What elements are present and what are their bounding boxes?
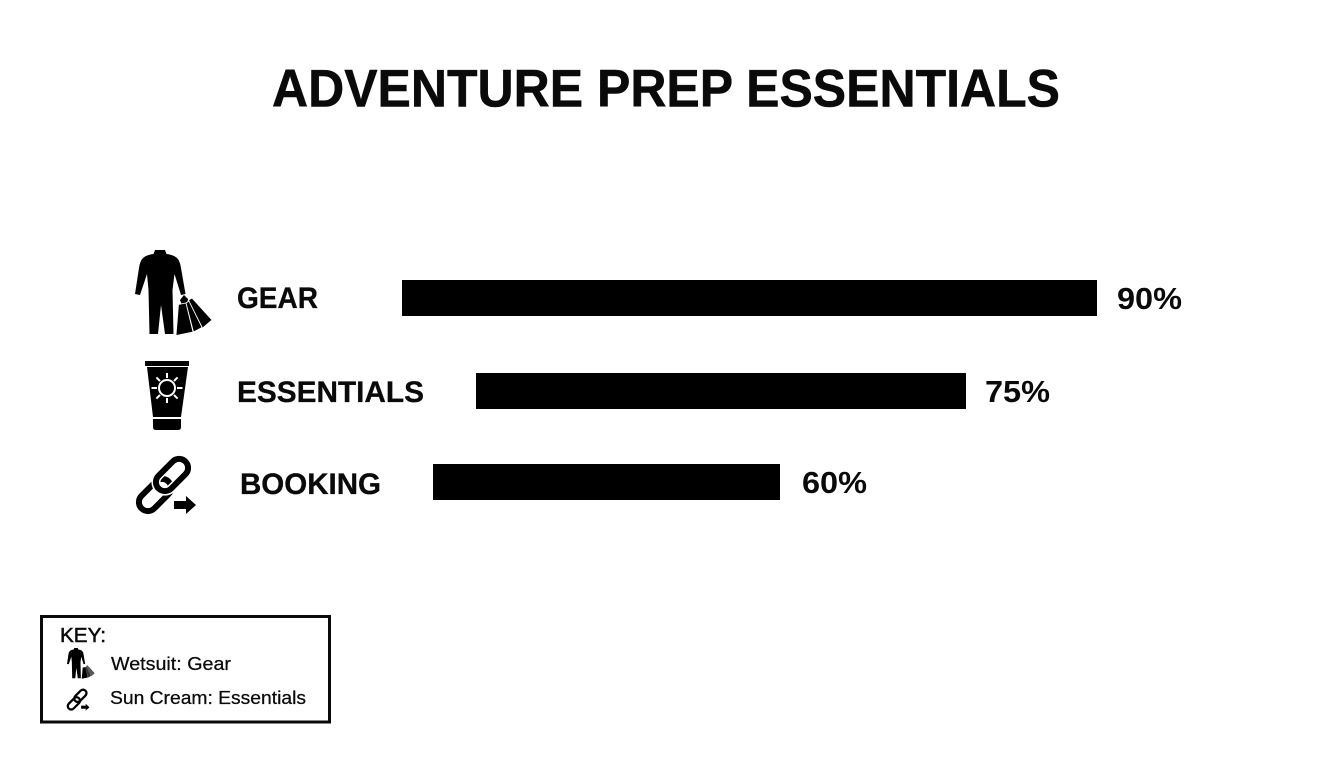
legend heading: KEY: [60, 625, 106, 647]
icon: chain link with arrow [135, 455, 196, 515]
label: gear: GEAR [237, 282, 318, 315]
icon: mini chain link [66, 688, 89, 711]
icon: wetsuit and fins [135, 250, 212, 336]
icon: mini wetsuit [67, 648, 95, 679]
value: gear: 90% [1117, 281, 1182, 316]
icon: sun cream tube [145, 361, 189, 430]
bar chart [135, 250, 1182, 515]
legend text: wetsuit: Wetsuit: Gear [111, 654, 231, 674]
row: gear [135, 250, 1182, 336]
legend frame [42, 616, 330, 722]
row: booking [135, 455, 867, 515]
bar: essentials [476, 373, 966, 409]
legend text: sun cream: Sun Cream: Essentials [110, 688, 306, 708]
bar: booking [433, 464, 780, 500]
label: booking: BOOKING [240, 468, 381, 501]
row: essentials [145, 361, 1050, 430]
legend: key [42, 616, 330, 722]
bar: gear [402, 280, 1097, 316]
value: essentials: 75% [985, 374, 1050, 409]
label: essentials: ESSENTIALS [237, 376, 424, 409]
title: ADVENTURE PREP ESSENTIALS [272, 60, 1060, 118]
value: booking: 60% [802, 465, 867, 500]
